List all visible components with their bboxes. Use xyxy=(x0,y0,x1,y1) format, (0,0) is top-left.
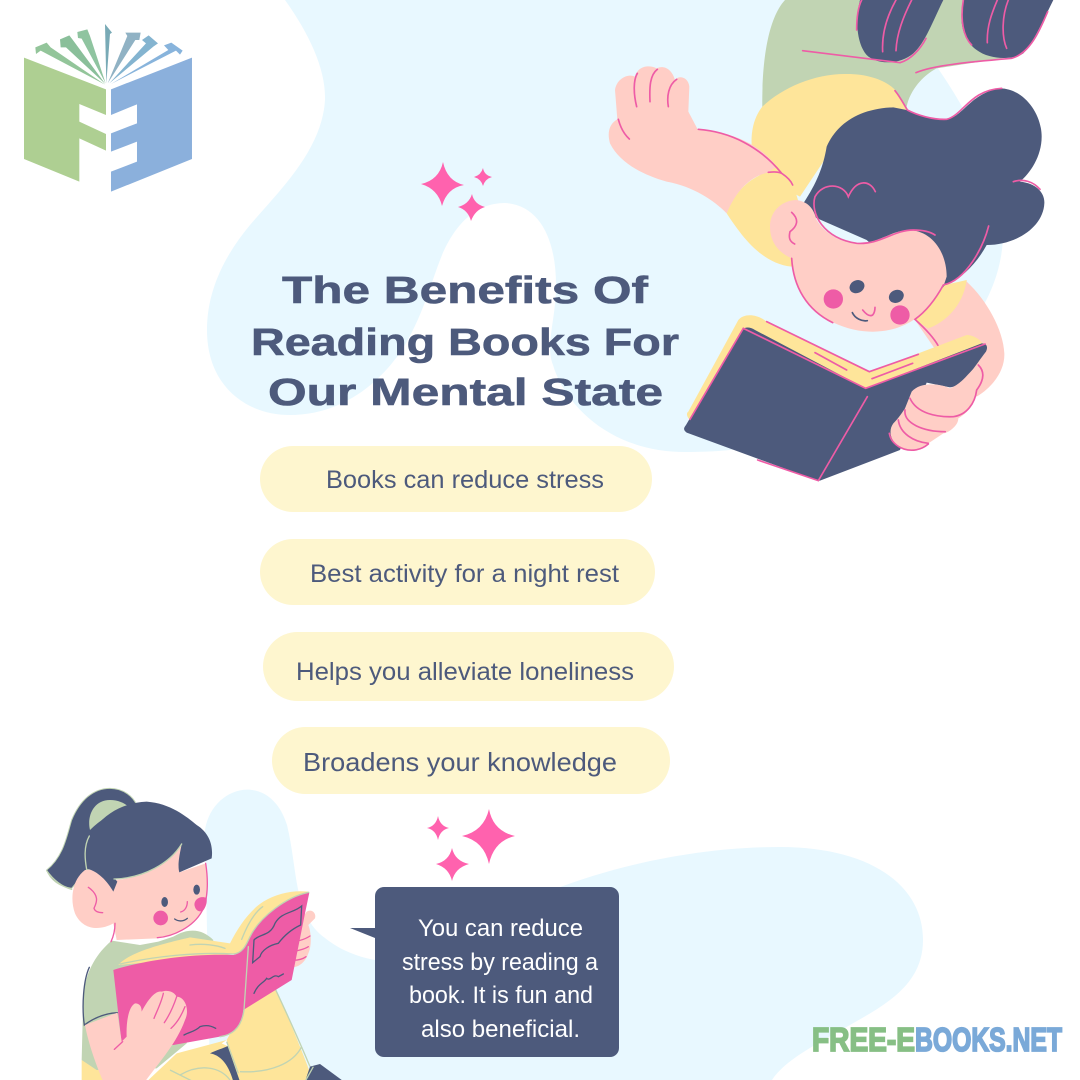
shirt sleeve xyxy=(727,172,800,267)
yellow shirt xyxy=(752,74,908,197)
speech bubble: stress by reading a xyxy=(402,949,599,976)
logo right page xyxy=(111,58,192,192)
benefit pill: loneliness xyxy=(263,632,674,701)
benefit pill: loneliness: Helps you alleviate loneliness xyxy=(296,658,634,686)
finger lines xyxy=(114,993,185,1049)
trouser fold lines xyxy=(170,1042,313,1080)
green shirt xyxy=(82,931,213,1070)
dark trouser leg right xyxy=(961,0,1053,58)
hair tie xyxy=(89,800,128,830)
hand holding book xyxy=(891,365,983,450)
background blob: top xyxy=(207,0,1003,452)
benefit pill: knowledge xyxy=(272,727,670,794)
mouth xyxy=(852,313,867,321)
book and hand outlines xyxy=(690,322,985,481)
far arm xyxy=(915,280,1004,397)
logo page rays xyxy=(35,24,183,85)
logo left page xyxy=(24,58,106,182)
benefit pill: reduce stress xyxy=(260,446,652,512)
gap under the book xyxy=(222,1040,229,1047)
legs and green top xyxy=(762,0,1053,133)
dark shoe left xyxy=(210,1046,240,1080)
benefit pill: night rest xyxy=(260,539,655,605)
title: Our Mental State xyxy=(268,372,663,414)
speech bubble: book. It is fun and xyxy=(409,982,593,1009)
main hair xyxy=(85,802,212,892)
book cover xyxy=(684,327,987,481)
speech bubble xyxy=(350,887,619,1057)
hairline and sleeve outlines xyxy=(47,836,207,1025)
background blob: bottom xyxy=(205,790,923,1080)
benefit pill: reduce stress: Books can reduce stress xyxy=(326,466,604,494)
ponytail xyxy=(47,788,147,888)
speech bubble: also beneficial. xyxy=(421,1016,580,1043)
pink outlines xyxy=(618,0,1048,346)
book pages xyxy=(118,891,308,965)
book decorations xyxy=(120,892,310,1037)
face xyxy=(770,200,947,332)
eyes xyxy=(161,885,200,907)
cheeks xyxy=(824,289,910,325)
book pages xyxy=(687,315,983,420)
raised arm and hand xyxy=(609,66,777,213)
eyes xyxy=(847,278,906,305)
trouser outer edge xyxy=(275,988,310,1067)
title xyxy=(251,270,679,414)
brand wordmark: FREE-E xyxy=(812,1021,915,1058)
girl reading, top right xyxy=(609,0,1053,481)
benefit pill: knowledge: Broadens your knowledge xyxy=(303,747,617,777)
near arm and hand xyxy=(85,991,187,1080)
face and ear xyxy=(72,845,207,940)
speech bubble: You can reduce xyxy=(418,915,583,942)
dark shoe right xyxy=(305,1064,344,1080)
logo: open book with FE mark xyxy=(24,24,192,192)
benefit pill: night rest: Best activity for a night rest xyxy=(310,560,619,588)
title: The Benefits Of xyxy=(282,270,648,312)
dark trouser leg left xyxy=(857,0,943,62)
collar xyxy=(915,280,967,328)
title: Reading Books For xyxy=(251,322,679,364)
cheeks xyxy=(153,897,207,925)
hair xyxy=(803,88,1044,300)
brand wordmark xyxy=(812,1021,1062,1058)
sparkles: above speech bubble xyxy=(427,809,515,881)
sparkles: above title xyxy=(421,162,492,221)
yellow trousers xyxy=(82,988,313,1080)
girl reading, bottom left xyxy=(47,788,344,1080)
hand behind book xyxy=(285,911,315,967)
book cover xyxy=(113,893,309,1045)
